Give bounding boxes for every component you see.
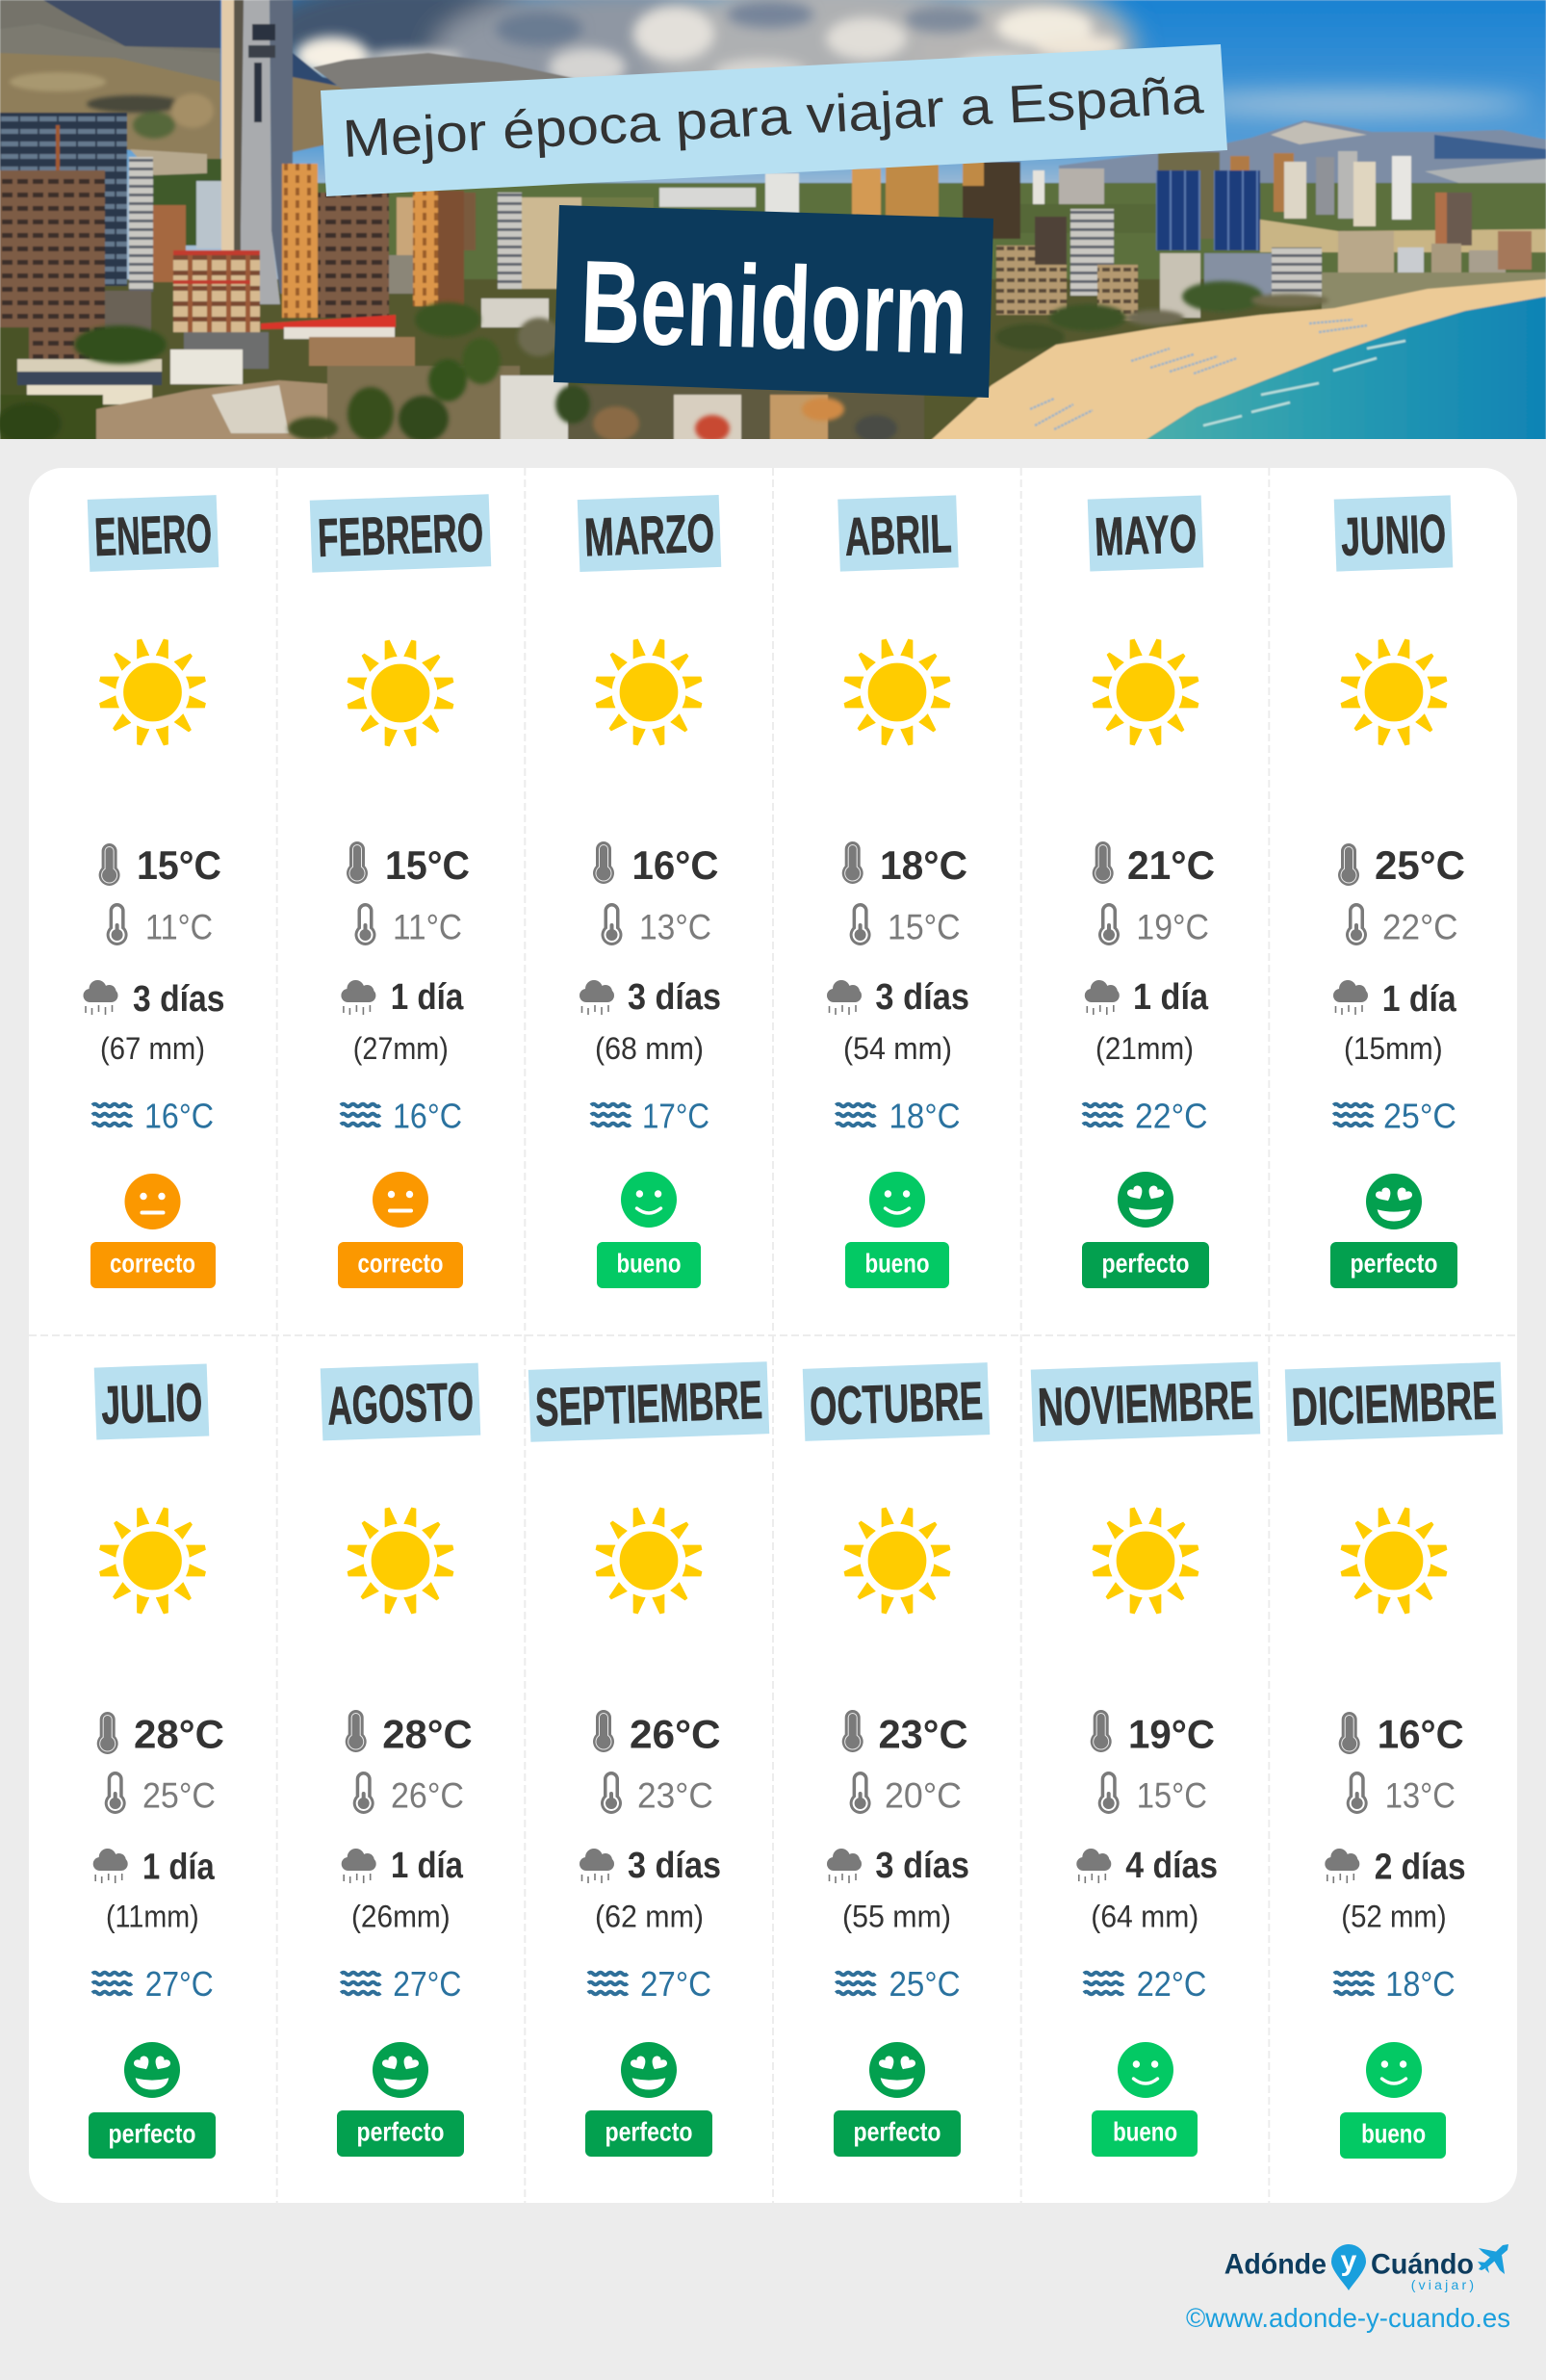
abril sea temperature <box>836 1097 961 1136</box>
octubre maximum temperature: 23°C <box>878 1712 968 1757</box>
febrero rating badge <box>338 1242 463 1288</box>
abril weather icon: sun <box>844 639 950 745</box>
month: marzo <box>578 495 721 1288</box>
julio rainy days: 1 día <box>142 1848 215 1888</box>
sea <box>1126 297 1546 453</box>
julio rating badge: perfecto <box>108 2119 196 2149</box>
junio rainy days <box>1333 979 1456 1020</box>
marzo heading: MARZO <box>583 503 715 567</box>
septiembre rainfall: (62 mm) <box>595 1900 704 1934</box>
octubre rating face <box>869 2042 925 2098</box>
enero sea temperature: 16°C <box>144 1097 214 1136</box>
mayo minimum temperature: 19°C <box>1136 908 1209 947</box>
mayo heading: MAYO <box>1094 503 1198 567</box>
icon: location pin <box>1331 2244 1366 2290</box>
month: febrero <box>310 494 491 1288</box>
julio weather icon: sun <box>100 1508 206 1614</box>
agosto rainy days <box>342 1846 464 1886</box>
septiembre minimum temperature: 23°C <box>637 1776 713 1816</box>
noviembre minimum temperature <box>1098 1772 1207 1816</box>
junio heading <box>1334 495 1453 572</box>
agosto rating badge <box>337 2110 464 2157</box>
mayo maximum temperature <box>1093 841 1215 888</box>
septiembre maximum temperature <box>593 1710 721 1757</box>
website credit: ©www.adonde-y-cuando.es <box>1186 2303 1510 2333</box>
month: agosto <box>321 1363 480 2157</box>
mayo sea temperature: 22°C <box>1135 1097 1207 1136</box>
octubre heading: OCTUBRE <box>809 1370 984 1436</box>
marzo sea temperature <box>591 1097 709 1136</box>
junio sea temperature <box>1333 1097 1456 1136</box>
agosto minimum temperature <box>353 1772 464 1816</box>
octubre weather icon: sun <box>844 1508 950 1614</box>
month: julio <box>89 1363 224 2159</box>
agosto weather icon: sun <box>348 1508 453 1614</box>
diciembre rating face <box>1366 2042 1422 2098</box>
noviembre heading: NOVIEMBRE <box>1037 1369 1254 1437</box>
month: diciembre <box>1285 1362 1503 2159</box>
abril heading <box>837 495 959 572</box>
month: septiembre <box>528 1361 769 2157</box>
julio sea temperature <box>92 1964 214 2004</box>
febrero sea temperature <box>341 1097 462 1136</box>
diciembre maximum temperature <box>1339 1712 1464 1757</box>
city name banner <box>554 205 993 398</box>
abril heading: ABRIL <box>843 503 953 567</box>
enero rainy days <box>83 979 225 1020</box>
julio minimum temperature: 25°C <box>142 1776 216 1816</box>
logo: Adónde y Cuándo viajar: Adónde <box>1224 2249 1327 2281</box>
noviembre minimum temperature: 15°C <box>1137 1776 1207 1816</box>
logo: Adónde y Cuándo viajar: Cuándo <box>1371 2249 1474 2281</box>
julio sea temperature: 27°C <box>145 1964 214 2004</box>
agosto maximum temperature: 28°C <box>382 1712 473 1757</box>
noviembre rainy days <box>1076 1846 1218 1886</box>
right buildings <box>1033 170 1044 204</box>
month: enero <box>83 495 225 1288</box>
febrero rating badge: correcto <box>358 1249 443 1279</box>
julio rating face <box>124 2042 180 2098</box>
julio heading <box>94 1363 209 1440</box>
marzo rating badge: bueno <box>616 1249 682 1279</box>
septiembre rainy days <box>580 1846 721 1886</box>
octubre rainy days: 3 días <box>875 1846 969 1886</box>
enero rainfall: (67 mm) <box>100 1031 205 1066</box>
diciembre sea temperature <box>1334 1964 1456 2004</box>
mayo maximum temperature: 21°C <box>1127 842 1215 888</box>
septiembre rainy days: 3 días <box>628 1846 721 1886</box>
abril rating badge: bueno <box>864 1249 930 1279</box>
mayo heading <box>1088 495 1203 572</box>
abril rainfall: (54 mm) <box>843 1031 952 1066</box>
octubre minimum temperature <box>850 1772 962 1816</box>
noviembre maximum temperature: 19°C <box>1128 1712 1215 1757</box>
enero heading: ENERO <box>93 503 213 567</box>
mayo rainy days <box>1085 977 1209 1018</box>
septiembre rating face <box>621 2042 677 2098</box>
septiembre heading: SEPTIEMBRE <box>534 1369 763 1437</box>
septiembre heading <box>528 1361 769 1442</box>
diciembre rainfall: (52 mm) <box>1341 1900 1447 1934</box>
octubre rating badge <box>834 2110 961 2157</box>
enero sea temperature <box>92 1097 214 1136</box>
octubre sea temperature <box>836 1964 961 2004</box>
enero rating face <box>125 1174 181 1229</box>
beach <box>917 279 1546 453</box>
junio minimum temperature <box>1346 903 1457 947</box>
febrero heading: FEBRERO <box>317 502 484 568</box>
febrero rainfall: (27mm) <box>353 1031 449 1066</box>
febrero weather icon: sun <box>348 640 453 746</box>
agosto heading: AGOSTO <box>326 1370 475 1436</box>
octubre sea temperature: 25°C <box>889 1964 961 2004</box>
julio minimum temperature <box>105 1772 216 1816</box>
enero maximum temperature <box>99 842 221 888</box>
city name: Benidorm <box>579 236 969 379</box>
abril maximum temperature: 18°C <box>880 842 967 888</box>
tower <box>221 0 234 250</box>
febrero maximum temperature <box>347 841 470 888</box>
diciembre rainy days <box>1325 1848 1466 1888</box>
marzo maximum temperature: 16°C <box>631 842 718 888</box>
enero minimum temperature: 11°C <box>145 908 213 947</box>
agosto sea temperature: 27°C <box>393 1964 461 2004</box>
agosto rainy days: 1 día <box>391 1846 464 1886</box>
mayo rating badge <box>1082 1242 1209 1288</box>
month: abril <box>827 495 969 1288</box>
marzo sea temperature: 17°C <box>642 1097 709 1136</box>
enero rating badge <box>90 1242 216 1288</box>
marzo minimum temperature: 13°C <box>639 908 711 947</box>
diciembre weather icon: sun <box>1341 1508 1447 1614</box>
septiembre rating badge <box>585 2110 712 2157</box>
abril rainy days: 3 días <box>875 977 969 1018</box>
febrero sea temperature: 16°C <box>393 1097 462 1136</box>
enero rating badge: correcto <box>110 1249 195 1279</box>
julio rating badge <box>89 2112 216 2159</box>
month: octubre <box>803 1362 990 2157</box>
septiembre minimum temperature <box>601 1772 713 1816</box>
septiembre sea temperature <box>588 1964 711 2004</box>
junio rainy days: 1 día <box>1382 979 1456 1020</box>
agosto sea temperature <box>341 1964 461 2004</box>
mayo weather icon: sun <box>1093 639 1198 745</box>
julio maximum temperature: 28°C <box>134 1712 224 1757</box>
diciembre rainy days: 2 días <box>1375 1848 1466 1888</box>
noviembre sea temperature <box>1084 1964 1206 2004</box>
septiembre weather icon: sun <box>596 1508 702 1614</box>
noviembre maximum temperature <box>1091 1710 1215 1757</box>
diciembre minimum temperature: 13°C <box>1385 1776 1456 1816</box>
noviembre sea temperature: 22°C <box>1137 1964 1206 2004</box>
icon: airplane <box>1478 2244 1508 2274</box>
panel: monthly climate calendar <box>29 468 1517 2203</box>
marzo rating badge <box>597 1242 701 1288</box>
logo: Adónde y Cuándo viajar <box>1224 2244 1508 2292</box>
septiembre rating badge: perfecto <box>605 2117 693 2147</box>
agosto maximum temperature <box>346 1710 473 1757</box>
julio heading: JULIO <box>100 1371 203 1436</box>
febrero rainy days: 1 día <box>391 977 464 1018</box>
febrero heading <box>310 494 491 573</box>
abril rating badge <box>845 1242 949 1288</box>
julio rainfall: (11mm) <box>106 1900 199 1934</box>
noviembre rainfall: (64 mm) <box>1091 1900 1198 1934</box>
diciembre sea temperature: 18°C <box>1385 1964 1456 2004</box>
header photo: Benidorm skyline and beach <box>0 0 1546 439</box>
junio rating badge <box>1330 1242 1457 1288</box>
agosto rating badge: perfecto <box>356 2117 445 2147</box>
agosto rating face <box>373 2042 428 2098</box>
month: mayo <box>1082 495 1215 1288</box>
agosto minimum temperature: 26°C <box>391 1776 464 1816</box>
noviembre weather icon: sun <box>1093 1508 1198 1614</box>
diciembre minimum temperature <box>1347 1772 1456 1816</box>
marzo rainy days: 3 días <box>628 977 721 1018</box>
mayo rainy days: 1 día <box>1133 977 1209 1018</box>
mayo sea temperature <box>1083 1097 1207 1136</box>
agosto rainfall: (26mm) <box>351 1900 451 1934</box>
febrero maximum temperature: 15°C <box>385 842 470 888</box>
abril rating face <box>869 1172 925 1228</box>
noviembre rating face <box>1118 2042 1173 2098</box>
octubre maximum temperature <box>842 1710 968 1757</box>
enero rainy days: 3 días <box>133 979 225 1020</box>
marzo maximum temperature <box>593 841 718 888</box>
octubre rating badge: perfecto <box>853 2117 941 2147</box>
abril rainy days <box>827 977 969 1018</box>
febrero rainy days <box>341 977 464 1018</box>
abril maximum temperature <box>842 841 967 888</box>
junio minimum temperature: 22°C <box>1382 908 1457 947</box>
junio maximum temperature: 25°C <box>1375 842 1465 888</box>
mayo rating badge: perfecto <box>1101 1249 1190 1279</box>
logo: Adónde y Cuándo viajar: y <box>1341 2245 1357 2277</box>
marzo weather icon: sun <box>596 639 702 745</box>
noviembre heading <box>1031 1361 1260 1442</box>
noviembre rating badge: bueno <box>1113 2117 1177 2147</box>
diciembre rating badge: bueno <box>1361 2119 1426 2149</box>
septiembre sea temperature: 27°C <box>640 1964 711 2004</box>
diciembre rating badge <box>1340 2112 1446 2159</box>
marzo rainfall: (68 mm) <box>595 1031 704 1066</box>
marzo minimum temperature <box>601 903 711 947</box>
mayo rainfall: (21mm) <box>1095 1031 1194 1066</box>
noviembre rating badge <box>1092 2110 1198 2157</box>
febrero minimum temperature <box>354 903 462 947</box>
mayo rating face <box>1118 1172 1173 1228</box>
diciembre maximum temperature: 16°C <box>1378 1712 1464 1757</box>
marzo rating face <box>621 1172 677 1228</box>
mayo minimum temperature <box>1098 903 1209 947</box>
febrero rating face <box>373 1172 428 1228</box>
enero maximum temperature: 15°C <box>137 842 221 888</box>
marzo rainy days <box>580 977 721 1018</box>
title text: Mejor época para viajar a España <box>341 65 1205 168</box>
marzo heading <box>578 495 721 572</box>
enero heading <box>88 495 219 572</box>
febrero minimum temperature: 11°C <box>393 908 462 947</box>
junio rating badge: perfecto <box>1350 1249 1438 1279</box>
noviembre rainy days: 4 días <box>1125 1846 1218 1886</box>
junio rainfall: (15mm) <box>1344 1031 1443 1066</box>
octubre rainfall: (55 mm) <box>842 1900 951 1934</box>
abril minimum temperature <box>850 903 961 947</box>
junio heading: JUNIO <box>1340 503 1447 567</box>
julio rainy days <box>93 1848 215 1888</box>
abril minimum temperature: 15°C <box>888 908 961 947</box>
month: noviembre <box>1031 1361 1260 2157</box>
left buildings <box>129 157 153 292</box>
enero minimum temperature <box>107 903 213 947</box>
abril sea temperature: 18°C <box>889 1097 961 1136</box>
agosto heading <box>321 1363 480 1440</box>
logo: Adónde y Cuándo viajar: (viajar) <box>1411 2277 1474 2292</box>
septiembre maximum temperature: 26°C <box>630 1712 721 1757</box>
junio sea temperature: 25°C <box>1383 1097 1456 1136</box>
junio rating face <box>1366 1174 1422 1229</box>
month: junio <box>1330 495 1465 1288</box>
octubre heading <box>803 1362 990 1441</box>
octubre rainy days <box>827 1846 969 1886</box>
enero weather icon: sun <box>100 639 206 745</box>
octubre minimum temperature: 20°C <box>885 1776 962 1816</box>
title banner <box>321 44 1227 196</box>
junio weather icon: sun <box>1341 639 1447 745</box>
